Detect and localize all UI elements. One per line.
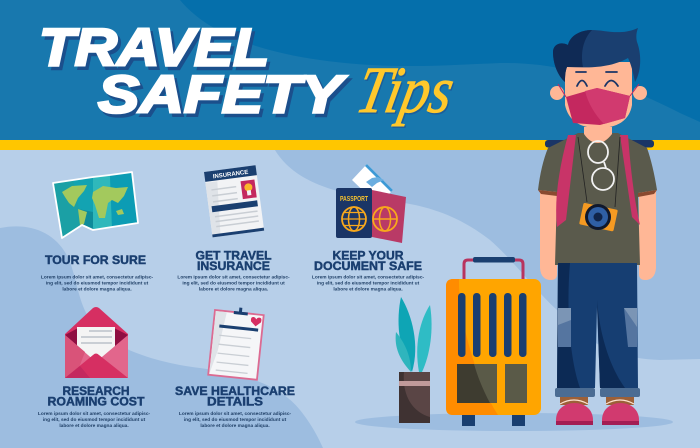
icon: insurance document: INSURANCE: [213, 170, 249, 180]
ground shadow: [355, 413, 673, 431]
tip: tour for sure: [41, 172, 154, 292]
trouser cuffs: [555, 388, 640, 397]
knee patches: [558, 308, 637, 347]
title: TRAVEL: [42, 22, 272, 81]
mask: [566, 88, 630, 125]
backpack top: [545, 140, 654, 148]
camera: [579, 203, 618, 232]
eyes: [576, 72, 618, 86]
title: [39, 18, 462, 128]
heading: DETAILS: [207, 395, 263, 409]
body text: ing elit, sed do eiusmod tempor incididunt ut: [184, 417, 287, 423]
sleeve cuffs: [538, 190, 657, 197]
icon: clipboard: [208, 305, 264, 380]
title: Tips: [351, 55, 460, 127]
mask straps: [558, 84, 639, 97]
body text: ing elit, sed do eiusmod tempor incididunt ut: [182, 280, 285, 286]
heading: INSURANCE: [197, 259, 270, 273]
suitcase: [446, 257, 541, 426]
head: [550, 28, 647, 128]
heading: KEEP YOUR: [332, 248, 404, 262]
icon: envelope: [65, 307, 128, 378]
heading: DOCUMENT SAFE: [314, 259, 422, 273]
title: TRAVEL: [39, 18, 269, 78]
tip: save healthcare details: [175, 305, 295, 429]
shirt: [538, 133, 657, 265]
body text: Lorem ipsum dolor sit amet, consectetur adipisc-: [41, 274, 154, 280]
shoes: [556, 400, 639, 425]
heading: ROAMING COST: [48, 395, 145, 409]
glasses: [588, 141, 614, 190]
body text: Lorem ipsum dolor sit amet, consectetur adipisc-: [38, 411, 151, 417]
title: Tips: [352, 56, 461, 128]
tip: research roaming cost: [38, 307, 151, 429]
hair: [553, 28, 640, 82]
ankles: [560, 397, 634, 405]
body text: ing elit, sed do eiusmod tempor incididunt ut: [43, 417, 146, 423]
arms: [540, 190, 656, 280]
icon: world map: [53, 172, 138, 238]
tip: keep your document safe: [312, 164, 425, 292]
body text: Lorem ipsum dolor sit amet, consectetur adipisc-: [179, 411, 292, 417]
lanyard: [578, 137, 620, 207]
body text: Lorem ipsum dolor sit amet, consectetur adipisc-: [177, 274, 290, 280]
character: traveller: [538, 28, 657, 425]
heading: SAVE HEALTHCARE: [175, 384, 295, 398]
body text: ing elit, sed do eiusmod tempor incididunt ut: [317, 280, 420, 286]
neck: [584, 127, 612, 143]
body text: labore et dolore magna aliqua.: [333, 286, 403, 292]
pants: [557, 263, 638, 388]
heading: TOUR FOR SURE: [45, 253, 146, 267]
body text: labore et dolore magna aliqua.: [200, 423, 270, 429]
body text: labore et dolore magna aliqua.: [62, 286, 132, 292]
icon: passports and ticket: PASSPORT: [340, 194, 368, 203]
plant: [396, 297, 432, 423]
tip: get travel insurance: [177, 165, 290, 292]
body text: labore et dolore magna aliqua.: [59, 423, 129, 429]
body text: Lorem ipsum dolor sit amet, consectetur adipisc-: [312, 274, 425, 280]
heading: GET TRAVEL: [196, 248, 272, 262]
backpack straps: [556, 135, 640, 227]
pants shading: [557, 263, 625, 388]
body text: labore et dolore magna aliqua.: [199, 286, 268, 292]
heading: RESEARCH: [62, 384, 130, 398]
title: SAFETY: [98, 66, 347, 124]
body text: ing elit, sed do eiusmod tempor incididunt ut: [46, 280, 149, 286]
title: SAFETY: [101, 69, 350, 128]
